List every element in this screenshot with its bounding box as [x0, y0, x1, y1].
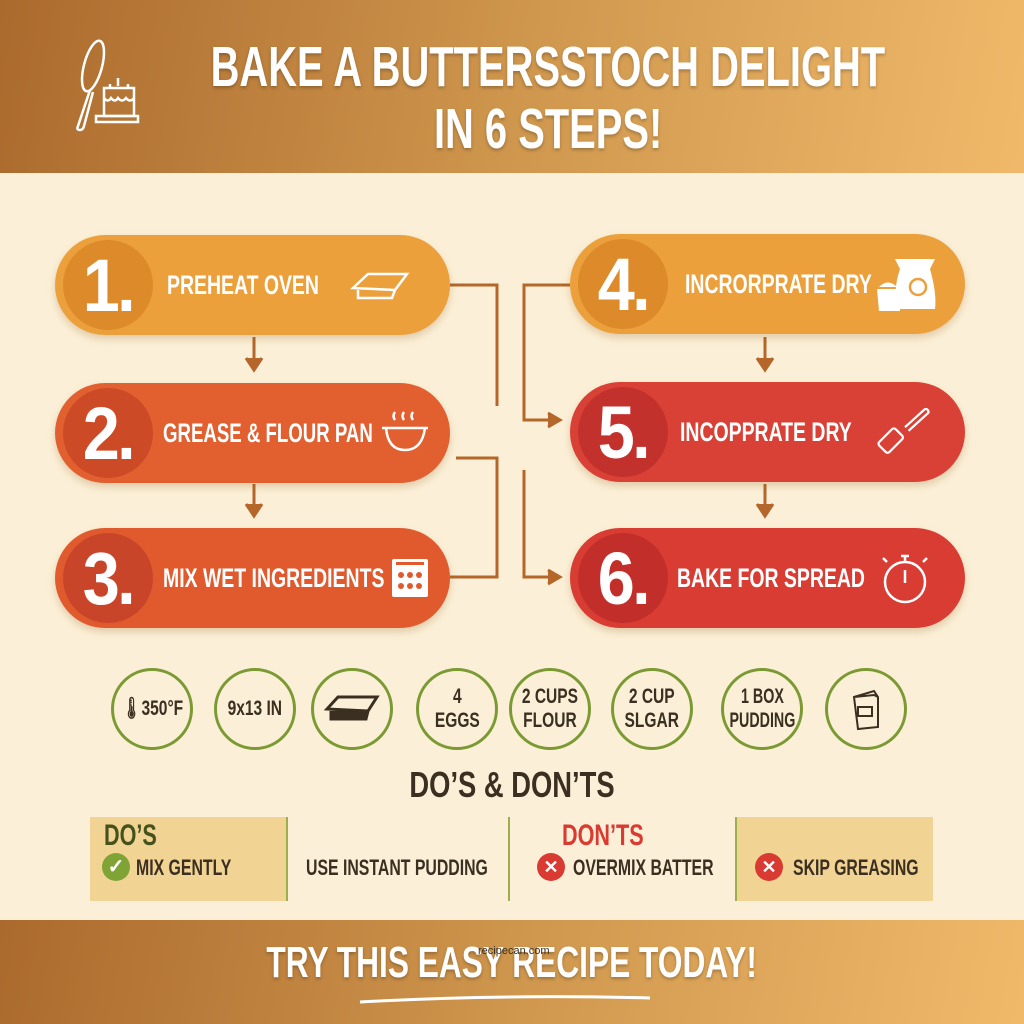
cell: dont overmix: ✕ [543, 857, 559, 877]
circle: pudding: PUDDING [729, 709, 795, 732]
step 6 [570, 528, 965, 628]
circle: sugar [611, 668, 693, 750]
circle: eggs [416, 668, 498, 750]
cell: do mix gently: DO’S [104, 819, 157, 852]
circle: pan size [214, 668, 296, 750]
step 6: BAKE FOR SPREAD [677, 563, 865, 593]
footer text: TRY THIS EASY RECIPE TODAY! [267, 938, 757, 987]
cell: skip greasing [735, 817, 933, 901]
step 2: GREASE & FLOUR PAN [163, 418, 373, 448]
cell: use instant pudding [288, 817, 510, 901]
step 1: PREHEAT OVEN [167, 270, 319, 300]
step 5 [570, 382, 965, 482]
circle: temperature: 🌡350°F [121, 697, 183, 720]
cell: skip greasing: ✕ [761, 857, 777, 877]
step 2 [55, 383, 450, 483]
ingredients row [111, 668, 907, 750]
circle: flour: FLOUR [523, 709, 577, 732]
circle: pudding: 1 BOX [741, 685, 783, 708]
step 2: 2. [83, 392, 133, 475]
step 4 [570, 234, 965, 334]
cell: use instant pudding: USE INSTANT PUDDING [306, 855, 488, 880]
step 5: INCOPPRATE DRY [680, 417, 852, 447]
cell: dont overmix: OVERMIX BATTER [573, 855, 714, 880]
circle: sugar: SLGAR [625, 709, 679, 732]
step 1: 1. [83, 244, 133, 327]
circle: pan icon [311, 668, 393, 750]
cell: dont overmix: DON’TS [562, 819, 644, 852]
cell: do mix gently: ✓ [108, 856, 124, 878]
circle: temperature [111, 668, 193, 750]
step 4: INCRORPRATE DRY [685, 269, 872, 299]
title: IN 6 STEPS! [434, 97, 662, 161]
step 6: 6. [598, 537, 648, 620]
step 5: 5. [598, 391, 648, 474]
step 3: MIX WET INGREDIENTS [163, 563, 384, 593]
step 3 [55, 528, 450, 628]
footer banner: recipecan.com [478, 945, 550, 957]
step 1 [55, 235, 450, 335]
cell: dont overmix [537, 819, 714, 881]
header banner [0, 0, 1024, 173]
step 3: 3. [83, 537, 133, 620]
footer banner [0, 920, 1024, 1024]
dos and donts heading: DO’S & DON’TS [409, 764, 615, 805]
circle: pan size: 9x13 IN [228, 697, 282, 720]
circle: eggs: 4 [453, 685, 461, 708]
title: BAKE A BUTTERSSTOCH DELIGHT [211, 35, 885, 99]
step 4: 4. [598, 243, 648, 326]
circle: sugar: 2 CUP [629, 685, 675, 708]
cell: do mix gently: MIX GENTLY [136, 855, 231, 880]
circle: eggs: EGGS [435, 709, 479, 732]
cell: skip greasing: SKIP GREASING [793, 855, 919, 880]
circle: box icon [825, 668, 907, 750]
title [211, 35, 886, 161]
cell: do mix gently [90, 817, 288, 901]
circle: flour: 2 CUPS [522, 685, 578, 708]
icon: whisk and cake [76, 40, 140, 132]
circle: flour [509, 668, 591, 750]
circle: pudding [721, 668, 803, 750]
